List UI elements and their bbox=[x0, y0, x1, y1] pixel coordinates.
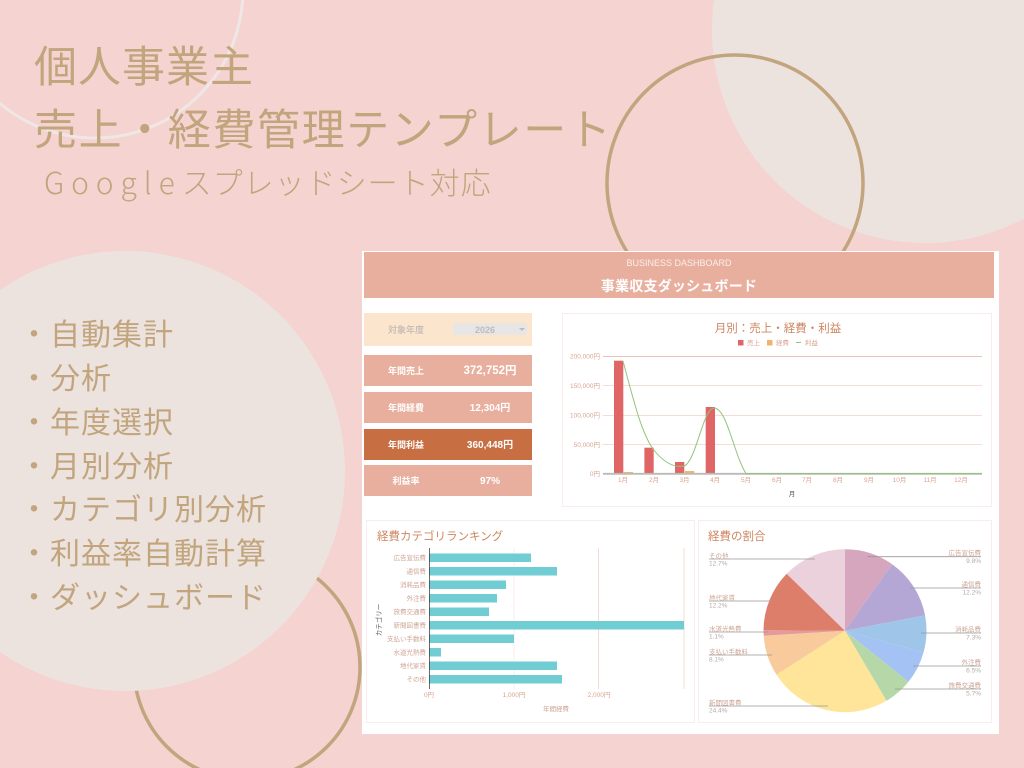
bars: sales bbox=[614, 361, 715, 474]
pie labels left: 支払い手数料 bbox=[709, 647, 748, 656]
chart: monthly sales, expenses, profit: 月別：売上・経費・利益 bbox=[715, 321, 842, 335]
pie labels right: 7.3% bbox=[966, 634, 981, 642]
chart: expense category ranking: 2,000円 bbox=[588, 691, 610, 699]
chart: expense category ranking: その他 bbox=[406, 674, 426, 684]
pie labels left: 8.1% bbox=[709, 656, 724, 664]
dashboard header bbox=[364, 252, 994, 298]
pie labels right: 9.8% bbox=[966, 558, 981, 565]
chart: monthly sales, expenses, profit: 11月 bbox=[923, 476, 937, 484]
KPI: annual expenses: 年間経費 bbox=[388, 402, 424, 413]
pie labels right: 旅費交通費 bbox=[948, 680, 982, 690]
KPI: annual sales bbox=[364, 355, 532, 386]
title bbox=[34, 33, 613, 158]
chart: monthly sales, expenses, profit: 12月 bbox=[954, 476, 968, 484]
pie leader lines bbox=[709, 557, 981, 706]
pie labels left: 1.1% bbox=[709, 634, 724, 640]
chart: monthly sales, expenses, profit: 10月 bbox=[893, 476, 906, 484]
chart: expense category ranking bbox=[366, 520, 694, 722]
chart: monthly sales, expenses, profit: 150,000円 bbox=[570, 382, 600, 390]
KPI: profit margin: 97% bbox=[480, 476, 500, 487]
chart: monthly sales, expenses, profit bbox=[562, 314, 992, 506]
chart: monthly sales, expenses, profit: 0円 bbox=[590, 470, 600, 478]
chart: monthly sales, expenses, profit: 7月 bbox=[802, 476, 812, 484]
feature list bbox=[19, 310, 267, 617]
chart: monthly sales, expenses, profit: 100,000円 bbox=[570, 412, 600, 420]
KPI: annual profit bbox=[364, 429, 532, 460]
selector: target year: 2026 bbox=[475, 325, 495, 335]
pie labels left: その他 bbox=[709, 551, 729, 560]
chart: monthly sales, expenses, profit: 200,000円 bbox=[570, 352, 600, 360]
chart: expense category ranking: 水道光熱費 bbox=[394, 648, 426, 656]
chart: monthly sales, expenses, profit: 4月 bbox=[710, 476, 720, 484]
pie labels left: 24.4% bbox=[709, 708, 728, 714]
chart: expense category ranking: カテゴリー bbox=[374, 604, 383, 636]
decorative circle: top right tan outline bbox=[607, 55, 863, 311]
chart: expense category ranking: 年間経費 bbox=[543, 704, 570, 713]
KPI: annual profit: 360,448円 bbox=[467, 439, 513, 451]
title: 売上・経費管理テンプレート bbox=[34, 96, 613, 158]
KPI: annual sales: 372,752円 bbox=[463, 364, 517, 377]
decorative circle: top left white outline bbox=[0, 0, 243, 138]
chart: expense share pie: 経費の割合 bbox=[708, 529, 766, 543]
feature list: ・カテゴリ別分析 bbox=[19, 485, 267, 529]
KPI: profit margin bbox=[364, 465, 532, 496]
chart: monthly sales, expenses, profit: 6月 bbox=[772, 476, 782, 484]
chart: expense category ranking: 通信費 bbox=[406, 566, 426, 576]
chart: monthly sales, expenses, profit: 50,000円 bbox=[574, 441, 600, 449]
KPI: annual expenses bbox=[364, 392, 532, 423]
pie labels right: 5.7% bbox=[966, 690, 981, 698]
dashboard header: 事業収支ダッシュボード bbox=[601, 278, 757, 294]
chart: monthly sales, expenses, profit: 8月 bbox=[833, 476, 843, 484]
pie labels right: 12.2% bbox=[963, 590, 981, 596]
KPI: annual expenses: 12,304円 bbox=[470, 402, 510, 414]
feature list: ・利益率自動計算 bbox=[19, 529, 267, 573]
selector: target year bbox=[364, 313, 532, 346]
KPI: annual sales: 年間売上 bbox=[388, 365, 424, 376]
chart: expense share pie bbox=[698, 520, 992, 722]
chart: monthly sales, expenses, profit: 月 bbox=[789, 490, 795, 498]
chart: expense category ranking: 広告宣伝費 bbox=[394, 553, 426, 562]
pie labels right bbox=[948, 548, 982, 698]
feature list: ・自動集計 bbox=[19, 310, 174, 354]
pie labels right: 6.5% bbox=[966, 668, 981, 674]
feature list: ・年度選択 bbox=[19, 398, 174, 442]
pie slices bbox=[764, 549, 927, 712]
dashboard header: BUSINESS DASHBOARD bbox=[626, 258, 732, 268]
chart: expense category ranking: 旅費交通費 bbox=[394, 607, 426, 616]
feature list: ・月別分析 bbox=[19, 442, 174, 486]
chart: expense category ranking: 経費カテゴリランキング bbox=[377, 529, 504, 543]
pie labels right: 外注費 bbox=[962, 658, 982, 666]
pie labels left: 水道光熱費 bbox=[709, 624, 742, 633]
pie labels right: 広告宣伝費 bbox=[948, 548, 982, 557]
chart: expense category ranking: 地代家賃 bbox=[400, 661, 426, 670]
pie labels left bbox=[709, 551, 748, 714]
pie labels left: 12.7% bbox=[709, 560, 728, 568]
chart: monthly sales, expenses, profit: 1月 bbox=[618, 476, 628, 484]
chart: expense category ranking: 1,000円 bbox=[503, 691, 525, 699]
decorative circle: top right beige bbox=[712, 0, 1024, 243]
subtitle: Googleスプレッドシート対応 bbox=[44, 159, 492, 203]
feature list: ・分析 bbox=[19, 354, 112, 398]
legend bbox=[738, 338, 818, 347]
chart: monthly sales, expenses, profit: 3月 bbox=[679, 476, 690, 484]
panel: dashboard bbox=[362, 251, 999, 734]
selector: target year: 対象年度 bbox=[388, 324, 424, 335]
line: profit bbox=[623, 361, 982, 474]
chart: expense category ranking: 外注費 bbox=[406, 594, 426, 602]
bars: expenses bbox=[624, 471, 725, 474]
KPI: profit margin: 利益率 bbox=[392, 475, 420, 486]
chart: monthly sales, expenses, profit: 9月 bbox=[864, 476, 874, 484]
decorative circle: bottom tan outline bbox=[134, 554, 360, 768]
legend: 利益 bbox=[805, 338, 818, 347]
chart: expense category ranking: 消耗品費 bbox=[400, 580, 426, 589]
chart: expense category ranking: 支払い手数料 bbox=[387, 634, 426, 643]
feature list: ・ダッシュボード bbox=[19, 573, 267, 617]
pie labels right: 消耗品費 bbox=[955, 624, 982, 634]
bars bbox=[429, 554, 684, 684]
legend: 経費 bbox=[776, 338, 790, 347]
chart: expense category ranking: 新聞図書費 bbox=[394, 620, 426, 630]
pie labels right: 通信費 bbox=[962, 580, 982, 588]
pie labels left: 地代家賃 bbox=[709, 593, 736, 602]
pie labels left: 12.2% bbox=[709, 602, 728, 610]
KPI: annual profit: 年間利益 bbox=[388, 439, 424, 450]
panel: feature list background circle bbox=[0, 251, 345, 691]
legend: 売上 bbox=[747, 338, 760, 347]
title: 個人事業主 bbox=[34, 33, 254, 95]
chart: monthly sales, expenses, profit: 2月 bbox=[649, 476, 659, 484]
chart: expense category ranking: 0円 bbox=[424, 691, 434, 699]
pie labels left: 新聞図書費 bbox=[709, 698, 742, 707]
chart: monthly sales, expenses, profit: 5月 bbox=[741, 476, 751, 484]
